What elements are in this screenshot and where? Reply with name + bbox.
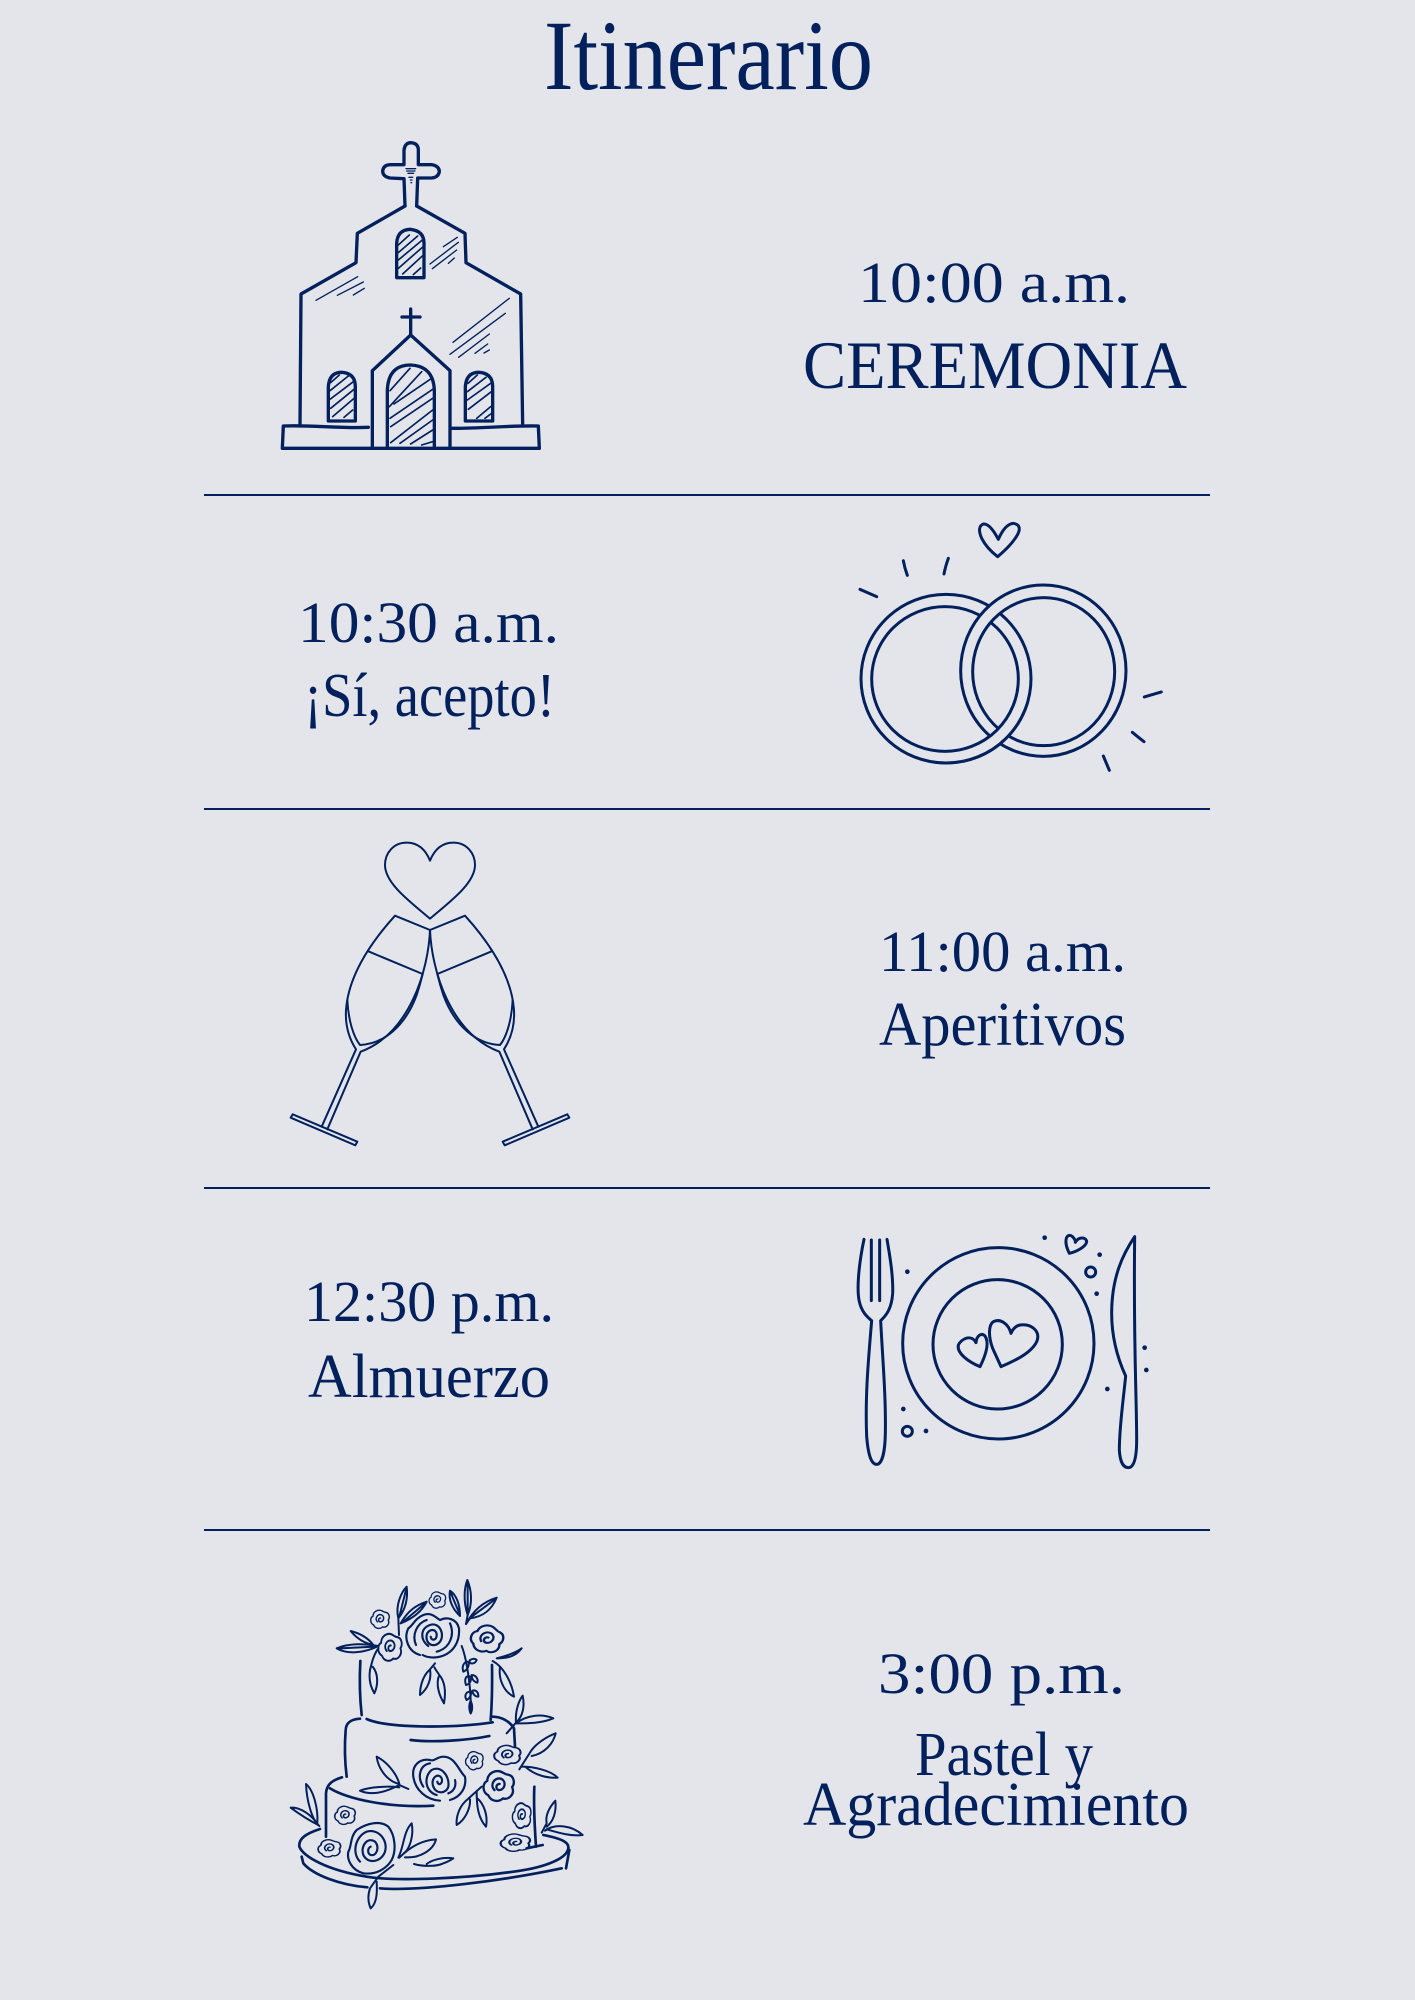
text block: appetizers time: 11:00 a.m. [879,919,1126,984]
icon: church [282,143,539,448]
icon: wedding rings [860,523,1161,770]
text block: lunch time: 12:30 p.m. [304,1269,554,1334]
section: appetizers [291,843,1126,1145]
text block: vows time: ¡Sí, acepto! [304,662,555,730]
icon: place setting [858,1235,1149,1468]
text block: ceremony time [803,250,1187,403]
section: vows [298,523,1161,770]
text block: ceremony time: 10:00 a.m. [858,250,1130,315]
text block: appetizers time [879,919,1126,1059]
text block: ceremony time: CEREMONIA [803,327,1187,403]
text block: cake and thanks time: 3:00 p.m. [878,1641,1125,1706]
text block: vows time: 10:30 a.m. [298,590,559,655]
text block: vows time [298,590,559,730]
section: ceremony [282,143,1187,448]
section: cake and thanks [291,1580,1189,1908]
text block: appetizers time: Aperitivos [879,991,1126,1059]
text block: cake and thanks time: Pastel y [915,1721,1093,1789]
text block: lunch time [304,1269,554,1411]
icon: floral wedding cake [291,1580,583,1908]
icon: champagne glasses with heart [291,843,569,1145]
section: lunch [304,1235,1149,1468]
text block: lunch time: Almuerzo [308,1343,550,1411]
text block: cake and thanks time: Agradecimiento [803,1771,1189,1839]
text block: cake and thanks time [803,1641,1189,1839]
title: Itinerario [544,0,873,111]
